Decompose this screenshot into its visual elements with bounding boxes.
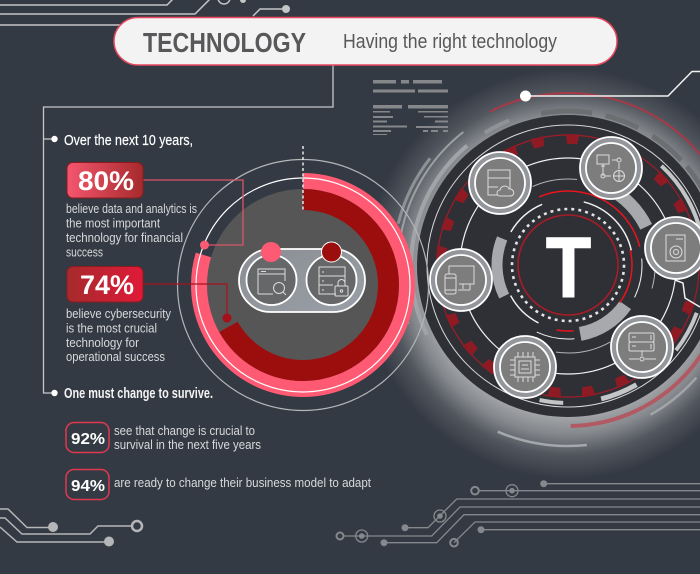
- stat 80 percent badge: [67, 162, 143, 198]
- dashed marker line: [302, 146, 304, 210]
- icon: server network: [611, 316, 673, 378]
- icon: devices: [430, 249, 492, 311]
- icon: microchip: [494, 336, 556, 398]
- circuit lines bottom left: [0, 509, 142, 546]
- stat 92 percent: survival in the next five years: [114, 437, 261, 452]
- wheel rings: [374, 72, 700, 460]
- background glow behind technology wheel: [363, 69, 700, 479]
- stat 94 percent: 94%: [71, 478, 105, 495]
- leader line right: [675, 280, 700, 307]
- wheel disc: [417, 115, 700, 417]
- title: TECHNOLOGY: [143, 27, 306, 58]
- technology wheel: [374, 72, 700, 460]
- 74 percent arc: [218, 200, 388, 370]
- icon: network and globe: [580, 137, 642, 199]
- donut chart: [178, 146, 428, 410]
- donut inner disc: [207, 189, 399, 381]
- connector 74 percent: [143, 284, 232, 322]
- outer decorative arcs of wheel: [328, 26, 700, 506]
- center icons pill: [239, 242, 365, 312]
- stat 80 percent description: the most important: [66, 216, 160, 230]
- stat 80 percent description: believe data and analytics is: [66, 201, 197, 216]
- stat 74 percent description: believe cybersecurity: [66, 306, 171, 321]
- stat 94 percent: [66, 470, 371, 500]
- title pill: [114, 18, 617, 65]
- icon: browser search: [246, 255, 296, 305]
- 80 percent arc: [199, 181, 407, 389]
- stat 74 percent description: technology for: [66, 335, 140, 350]
- stat 94 percent: are ready to change their business model to adapt: [114, 475, 371, 490]
- stat 80 percent description: success: [66, 244, 103, 260]
- stat 80 percent description: technology for financial: [66, 230, 183, 245]
- white inner ring: [196, 178, 410, 392]
- inner hub arcs: [446, 143, 690, 387]
- stat 80 percent description: [66, 201, 197, 260]
- circuit lines bottom right: [336, 480, 700, 546]
- stat 74 percent description: [66, 306, 171, 364]
- bullet dots: [51, 136, 58, 396]
- dark red marker dot: [322, 242, 342, 262]
- stat 74 percent description: operational success: [66, 349, 165, 364]
- title connector line: [44, 65, 333, 393]
- heading: one must change to survive: One must change to survive.: [64, 386, 213, 402]
- subtitle: Having the right technology: [343, 31, 557, 53]
- stat 92 percent: 92%: [71, 431, 105, 448]
- connector 80 percent: [143, 180, 243, 250]
- outer thin ring: [178, 160, 428, 410]
- red wheel teeth: [436, 134, 695, 398]
- circuit lines top left: [0, 0, 290, 25]
- stat 74 percent badge: [67, 266, 143, 302]
- leader line top right: [520, 72, 700, 102]
- stat 80 percent badge: 80%: [78, 166, 134, 196]
- pink marker dot: [261, 242, 281, 262]
- icon: cloud server: [469, 152, 531, 214]
- stat 74 percent badge: 74%: [80, 270, 134, 300]
- decorative data text blocks: [373, 80, 448, 135]
- stat 92 percent: see that change is crucial to: [114, 423, 255, 438]
- stat 92 percent: [66, 422, 261, 452]
- stat 74 percent description: is the most crucial: [66, 320, 157, 336]
- central letter T: T: [546, 221, 591, 316]
- heading: over the next 10 years: Over the next 10 years,: [64, 132, 193, 149]
- icon: server lock: [306, 255, 356, 305]
- icon: hard drive: [645, 217, 700, 279]
